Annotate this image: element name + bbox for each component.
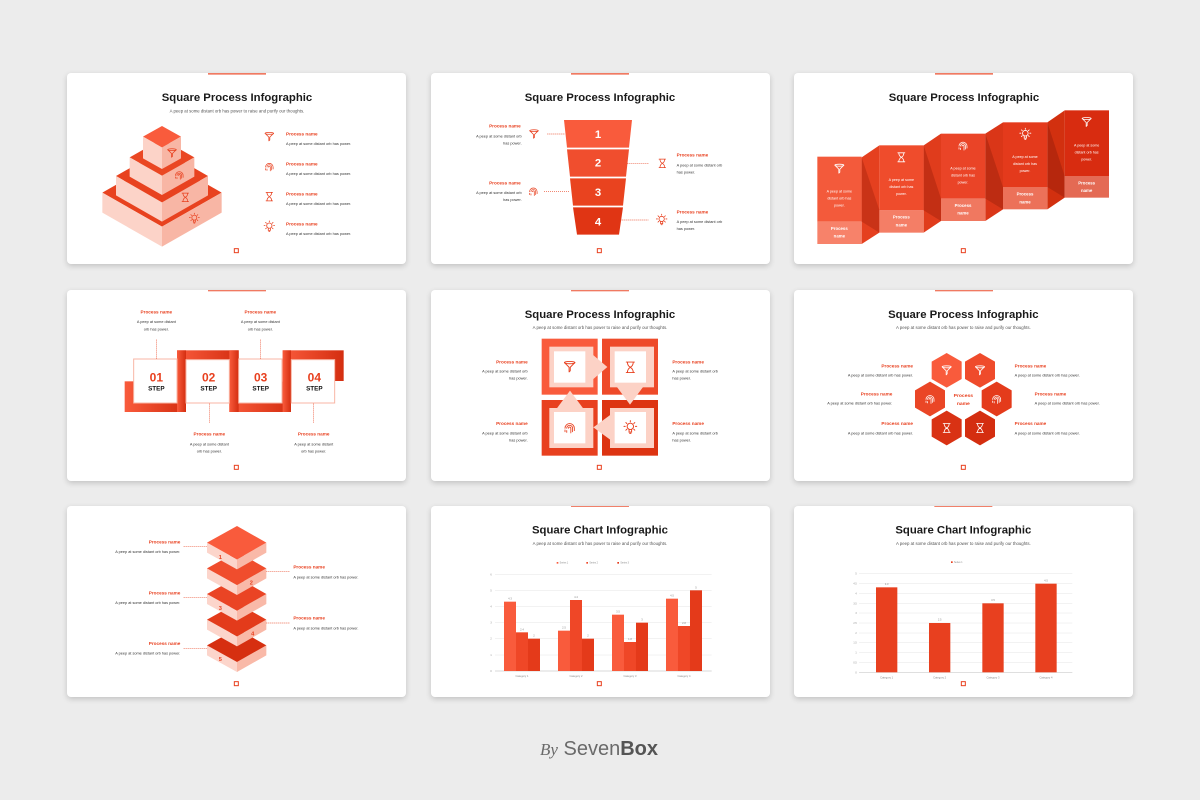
steps: A peep at some — [889, 178, 914, 182]
subtitle: A peep at some distant orb has power to raise and purify our thoughts. — [896, 541, 1031, 546]
quad labels: Process name — [496, 421, 528, 426]
stack labels: Process name — [149, 641, 181, 646]
step labels: orb has power. — [197, 450, 222, 454]
steps: distant orb has — [827, 196, 851, 200]
steps: name — [957, 211, 969, 216]
funnel: 4 — [595, 217, 602, 229]
chart: 4.4 — [574, 595, 578, 599]
funnel labels — [476, 124, 722, 231]
subtitle: A peep at some distant orb has power to raise and purify our thoughts. — [533, 541, 667, 546]
step boxes: STEP — [252, 386, 269, 393]
hex labels — [827, 363, 1100, 436]
quad labels: has power. — [672, 377, 691, 381]
steps — [817, 110, 1109, 244]
steps: name — [834, 234, 846, 239]
chart: Category 3 — [986, 675, 1000, 679]
process list: Process name — [286, 192, 318, 197]
chart: Series 3 — [620, 562, 630, 565]
quad labels: A peep at some distant orb — [482, 370, 528, 374]
hex labels: A peep at some distant orb has power. — [1015, 374, 1080, 378]
quad — [542, 339, 658, 456]
steps: distant orb has — [1075, 150, 1099, 154]
process list — [264, 132, 351, 236]
step labels: orb has power. — [144, 327, 169, 331]
chart: 2.5 — [853, 623, 857, 625]
steps: distant orb has — [889, 185, 913, 189]
stack labels: Process name — [149, 540, 181, 545]
slide 1: pyramid — [67, 73, 406, 264]
layer stack: 4 — [251, 631, 255, 637]
hex labels: Process name — [1015, 363, 1047, 368]
step boxes — [134, 359, 335, 403]
slide 4: steps — [67, 290, 406, 481]
chart: 4.3 — [508, 597, 512, 601]
layer stack: 1 — [219, 555, 222, 561]
chart: 4 — [855, 593, 857, 595]
step boxes: 03 — [254, 370, 268, 384]
funnel: 3 — [595, 187, 601, 199]
funnel labels: A peep at some distant orb — [476, 191, 522, 195]
quad labels — [482, 359, 718, 443]
stack labels — [115, 540, 358, 656]
chart: 0.5 — [853, 662, 857, 664]
chart: 6 — [490, 574, 492, 576]
quad labels: has power. — [509, 377, 528, 381]
step labels: A peep at some distant — [137, 320, 177, 324]
chart: 0 — [855, 672, 857, 674]
funnel — [564, 120, 632, 235]
steps: power. — [1081, 157, 1092, 161]
chart: 3.5 — [853, 603, 857, 605]
funnel: 1 — [595, 129, 601, 141]
stack labels: A peep at some distant orb has power. — [115, 652, 180, 656]
step labels: A peep at some distant — [241, 320, 281, 324]
steps: Process — [1017, 192, 1034, 197]
chart: Series 2 — [589, 562, 599, 565]
steps: Process — [831, 226, 848, 231]
steps: A peep at some — [950, 166, 976, 170]
chart: 0 — [490, 671, 492, 673]
title: Square Chart Infographic — [895, 525, 1031, 537]
quad labels: Process name — [496, 359, 528, 364]
subtitle: A peep at some distant orb has power to raise and purify our thoughts. — [896, 325, 1031, 330]
funnel labels: A peep at some distant orb — [677, 163, 722, 167]
hex cluster: name — [957, 401, 970, 407]
stack labels: A peep at some distant orb has power. — [293, 575, 358, 579]
chart: 1 — [855, 653, 857, 655]
funnel labels: Process name — [489, 181, 521, 186]
stack labels: A peep at some distant orb has power. — [115, 601, 180, 605]
chart: 2 — [490, 639, 492, 641]
stack labels: Process name — [293, 565, 325, 570]
slide 3: stair columns — [794, 73, 1133, 264]
title: Square Process Infographic — [525, 92, 675, 104]
chart: 2 — [855, 633, 857, 635]
steps: power. — [1020, 169, 1030, 173]
hex cluster — [915, 353, 1012, 445]
process list: A peep at some distant orb has power. — [286, 232, 351, 236]
chart: 2.4 — [520, 627, 524, 631]
title: Square Chart Infographic — [532, 525, 668, 537]
quad labels: Process name — [672, 359, 704, 364]
step labels: Process name — [298, 432, 330, 437]
chart: 3 — [641, 618, 643, 622]
chart: 5 — [490, 590, 492, 592]
funnel labels: Process name — [677, 209, 709, 214]
steps: power. — [896, 192, 907, 196]
hex labels: A peep at some distant orb has power. — [827, 402, 892, 406]
slide 5: quad squares — [431, 290, 770, 481]
funnel labels: has power. — [503, 198, 522, 202]
chart: Category 2 — [933, 675, 947, 679]
layer stack: 5 — [219, 657, 222, 663]
chart: 5 — [695, 585, 697, 589]
connectors — [862, 110, 1065, 244]
chart: 4.3 — [885, 582, 889, 586]
funnel labels: Process name — [677, 153, 709, 158]
step labels: A peep at some distant — [294, 442, 334, 446]
step labels: Process name — [245, 310, 277, 315]
step boxes: STEP — [148, 386, 165, 393]
chart: Category 1 — [880, 675, 894, 679]
quad labels: has power. — [672, 439, 691, 443]
slide 2: funnel — [431, 73, 770, 264]
layer stack: 3 — [219, 606, 222, 612]
chart: Category 1 — [515, 674, 529, 678]
steps: distant orb has — [951, 173, 975, 177]
quad labels: A peep at some distant orb — [482, 432, 528, 436]
title: Square Process Infographic — [888, 309, 1039, 321]
layer stack: 2 — [250, 580, 253, 586]
hex labels: A peep at some distant orb has power. — [1035, 402, 1100, 406]
step boxes: 01 — [150, 370, 163, 384]
slide 7: stacked layers — [67, 506, 406, 697]
chart: 4 — [490, 607, 492, 609]
chart: 3.5 — [991, 598, 995, 602]
step labels: Process name — [141, 310, 173, 315]
chart: Series 1 — [560, 562, 569, 565]
title: Square Process Infographic — [525, 309, 675, 321]
chart — [853, 561, 1072, 679]
funnel labels: has power. — [677, 227, 695, 231]
chart: 5 — [855, 574, 857, 576]
chart: 1.5 — [853, 643, 857, 645]
chart: 1 — [490, 655, 492, 657]
hex labels: A peep at some distant orb has power. — [848, 374, 913, 378]
steps: Process — [1078, 180, 1096, 185]
footer brand: By SevenBox — [540, 738, 658, 760]
chart: Category 4 — [1039, 675, 1053, 679]
hex labels: A peep at some distant orb has power. — [1015, 432, 1080, 436]
title: Square Process Infographic — [889, 92, 1039, 104]
hex cluster: Process — [954, 393, 973, 399]
chart: 3 — [855, 613, 857, 615]
chart: 3.5 — [616, 610, 620, 614]
funnel labels: has power. — [677, 170, 695, 174]
process list: Process name — [286, 132, 318, 137]
band — [125, 350, 344, 412]
hex labels: Process name — [881, 363, 913, 368]
chart: 4.5 — [853, 584, 857, 586]
process list: A peep at some distant orb has power. — [286, 202, 351, 206]
stack labels: Process name — [293, 616, 325, 621]
subtitle: A peep at some distant orb has power to raise and purify our thoughts. — [533, 325, 667, 330]
step labels: Process name — [194, 432, 226, 437]
hex labels: Process name — [1035, 391, 1067, 396]
step boxes: STEP — [200, 386, 217, 393]
steps: A peep at some — [1012, 155, 1038, 159]
chart: 2.8 — [682, 621, 686, 625]
step boxes: STEP — [306, 386, 323, 393]
steps: power. — [958, 180, 968, 184]
quad labels: A peep at some distant orb — [672, 432, 718, 436]
steps: name — [896, 222, 908, 227]
step labels: orb has power. — [301, 450, 326, 454]
steps: name — [1081, 188, 1093, 193]
chart: 2.5 — [562, 626, 566, 630]
quad labels: has power. — [509, 439, 528, 443]
chart: 2.5 — [938, 618, 942, 622]
funnel labels: Process name — [489, 124, 521, 129]
chart — [490, 562, 712, 678]
steps: A peep at some — [1074, 143, 1099, 147]
step labels: orb has power. — [248, 327, 273, 331]
chart: Series 1 — [954, 561, 963, 564]
slide 6: hexagons — [794, 290, 1133, 481]
process list: A peep at some distant orb has power. — [286, 172, 351, 176]
layer stack — [207, 526, 266, 672]
chart: Category 3 — [623, 674, 637, 678]
chart: 4.5 — [670, 594, 674, 598]
hex labels: Process name — [861, 391, 893, 396]
chart: 4.5 — [1044, 578, 1048, 582]
steps: distant orb has — [1013, 162, 1037, 166]
stack labels: A peep at some distant orb has power. — [293, 626, 358, 630]
hex labels: A peep at some distant orb has power. — [848, 432, 913, 436]
process list: Process name — [286, 162, 318, 167]
slide 8: grouped bar chart — [431, 506, 770, 697]
pyramid — [102, 126, 222, 247]
steps: name — [1019, 199, 1031, 204]
steps: Process — [955, 203, 972, 208]
chart: 2 — [533, 634, 535, 638]
funnel labels: A peep at some distant orb — [476, 134, 522, 138]
slide 9: single bar chart — [794, 506, 1133, 697]
steps: A peep at some — [827, 189, 852, 193]
step boxes: 04 — [308, 370, 321, 384]
chart: Category 4 — [677, 674, 691, 678]
funnel labels: A peep at some distant orb — [677, 220, 722, 224]
stack labels: Process name — [149, 590, 181, 595]
stack labels: A peep at some distant orb has power. — [115, 550, 180, 554]
hex labels: Process name — [881, 421, 913, 426]
chart: 3 — [490, 623, 492, 625]
step labels — [137, 310, 334, 454]
chart: 2 — [587, 634, 589, 638]
steps: power. — [834, 203, 845, 207]
title: Square Process Infographic — [162, 92, 312, 104]
step labels: A peep at some distant — [190, 442, 230, 446]
funnel labels: has power. — [503, 141, 522, 145]
subtitle: A peep at some distant orb has power to raise and purify our thoughts. — [170, 109, 304, 114]
funnel: 2 — [595, 158, 601, 170]
chart: 1.8 — [628, 637, 632, 641]
process list: Process name — [286, 222, 318, 227]
steps: Process — [893, 215, 910, 220]
process list: A peep at some distant orb has power. — [286, 142, 351, 146]
chart: Category 2 — [569, 674, 583, 678]
quad labels: Process name — [672, 421, 704, 426]
quad labels: A peep at some distant orb — [672, 370, 718, 374]
hex labels: Process name — [1015, 421, 1047, 426]
step boxes: 02 — [202, 370, 216, 384]
